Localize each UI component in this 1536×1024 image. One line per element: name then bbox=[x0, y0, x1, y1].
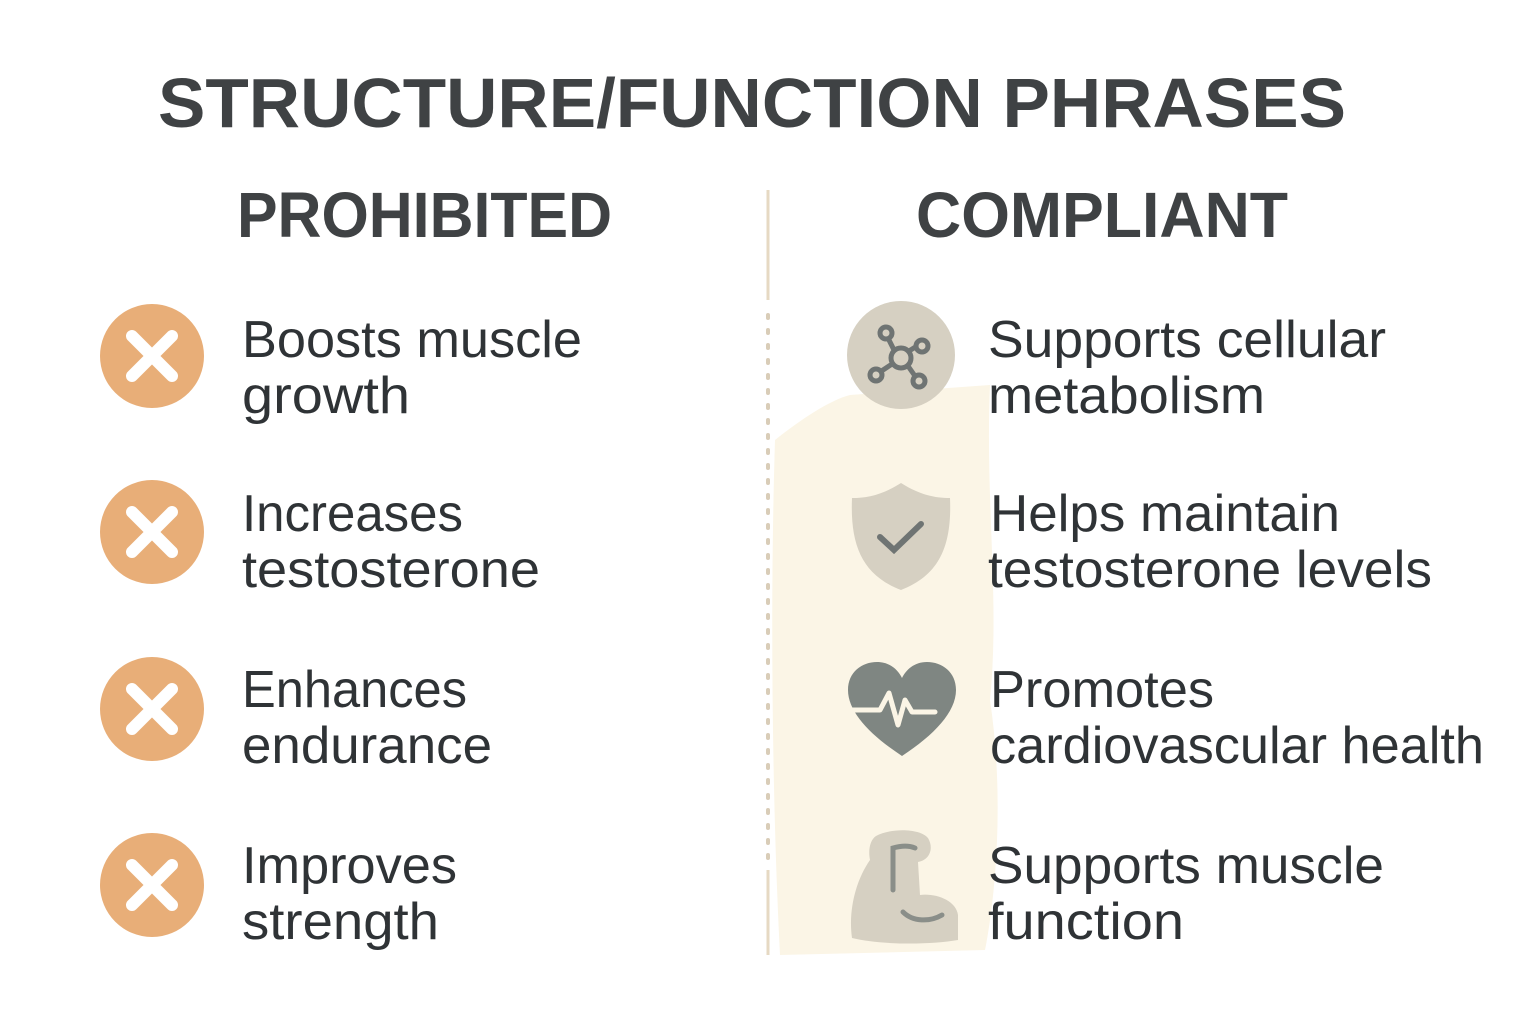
icon: molecule bbox=[847, 301, 955, 409]
panel: compliant list bbox=[847, 301, 1484, 951]
icon: shield check bbox=[852, 483, 950, 590]
text: promotes cardiovascular health: cardiovascular health bbox=[990, 717, 1484, 775]
icon: x 1 bbox=[100, 304, 204, 408]
icon: muscle arm bbox=[851, 830, 958, 944]
text: supports cellular metabolism bbox=[988, 311, 1386, 425]
text: enhances endurance: endurance bbox=[242, 717, 492, 775]
text: helps maintain testosterone levels: Helps maintain bbox=[990, 485, 1340, 543]
text: improves strength bbox=[242, 837, 457, 951]
text: promotes cardiovascular health: Promotes bbox=[990, 661, 1214, 719]
divider bbox=[766, 190, 770, 955]
icon: heart pulse bbox=[848, 662, 956, 756]
text: improves strength: Improves bbox=[242, 837, 457, 895]
text: helps maintain testosterone levels: testosterone levels bbox=[988, 541, 1432, 599]
text: increases testosterone bbox=[242, 485, 540, 599]
icon: x 3 bbox=[100, 657, 204, 761]
text: enhances endurance: Enhances bbox=[242, 661, 467, 719]
text: helps maintain testosterone levels bbox=[988, 485, 1432, 599]
beige background blob bbox=[772, 385, 998, 955]
icon: x 2 bbox=[100, 480, 204, 584]
heading: compliant: COMPLIANT bbox=[916, 179, 1288, 251]
text: boosts muscle growth: growth bbox=[242, 367, 410, 425]
heading: prohibited: PROHIBITED bbox=[237, 179, 612, 251]
text: supports muscle function: function bbox=[988, 893, 1184, 951]
title: STRUCTURE/FUNCTION PHRASES bbox=[158, 64, 1346, 142]
text: supports muscle function: Supports muscle bbox=[988, 837, 1384, 895]
icon: x 4 bbox=[100, 833, 204, 937]
text: supports cellular metabolism: metabolism bbox=[988, 367, 1265, 425]
panel: prohibited list bbox=[100, 304, 582, 951]
text: supports cellular metabolism: Supports cellular bbox=[988, 311, 1386, 369]
text: improves strength: strength bbox=[242, 893, 439, 951]
text: supports muscle function bbox=[988, 837, 1384, 951]
text: increases testosterone: Increases bbox=[242, 485, 463, 543]
text: boosts muscle growth bbox=[242, 311, 582, 425]
text: promotes cardiovascular health bbox=[990, 661, 1484, 775]
text: boosts muscle growth: Boosts muscle bbox=[242, 311, 582, 369]
text: increases testosterone: testosterone bbox=[242, 541, 540, 599]
text: enhances endurance bbox=[242, 661, 492, 775]
